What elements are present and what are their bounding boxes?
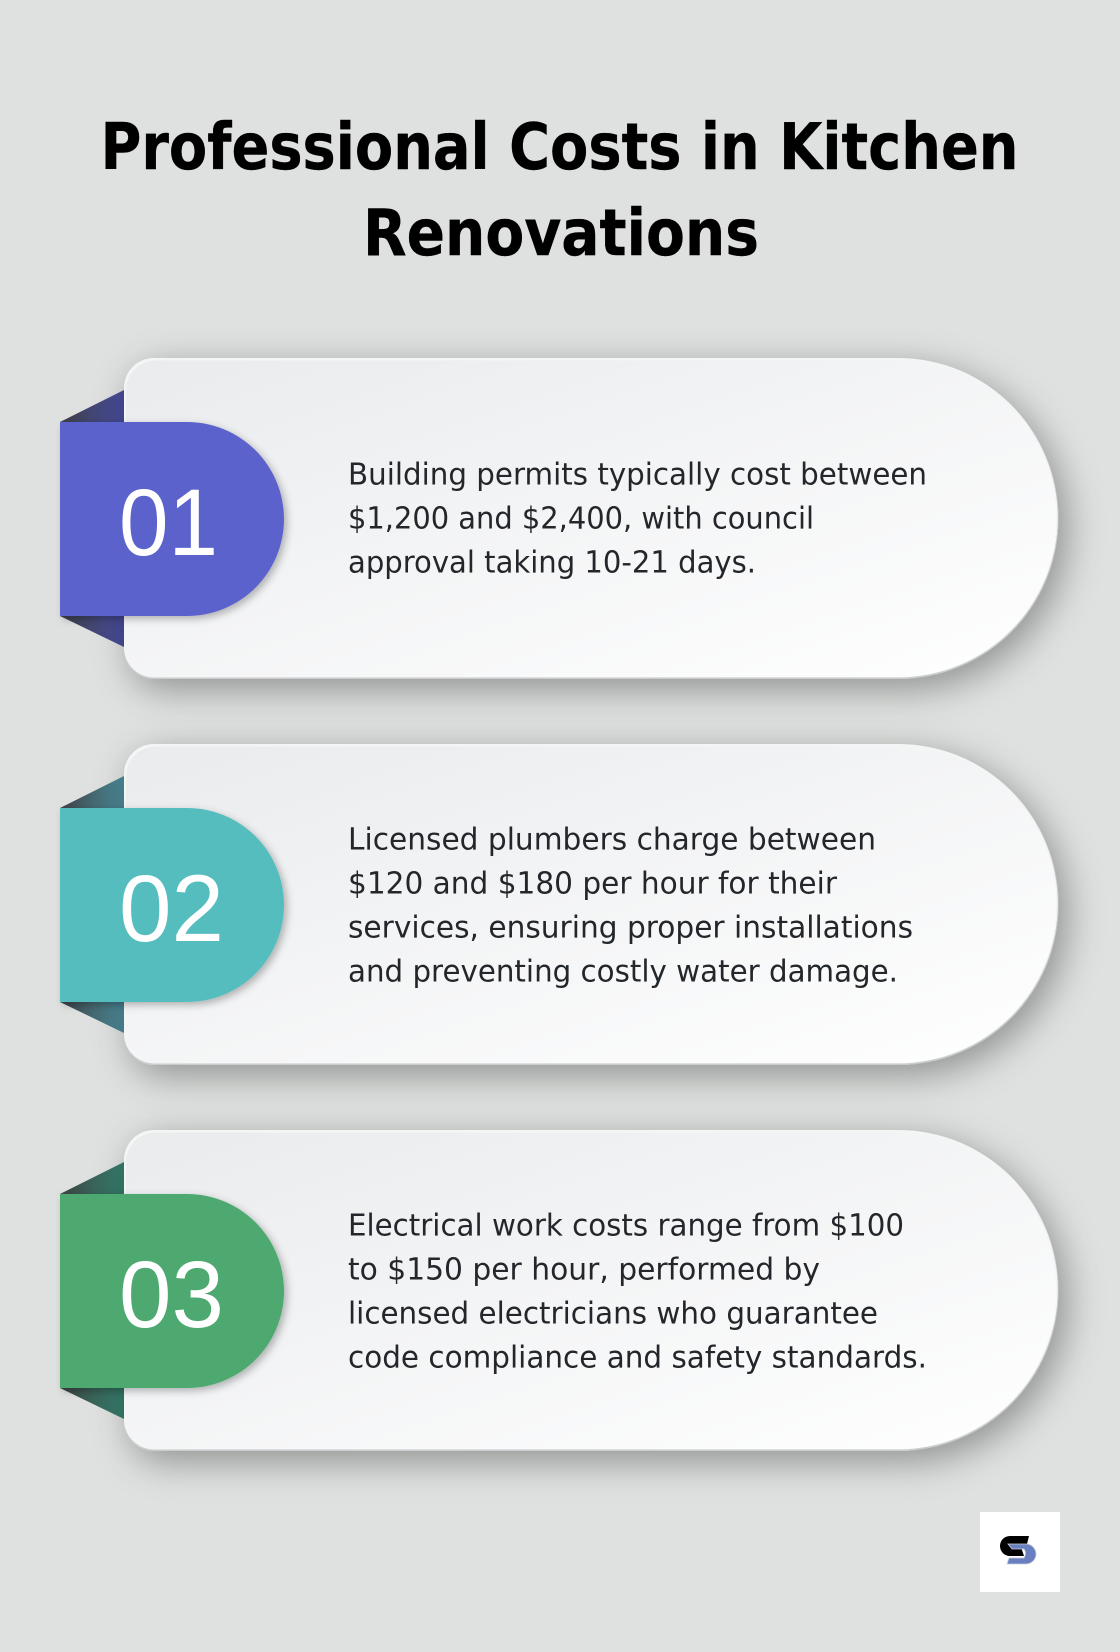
text: step 01: $1,200 and $2,400, with council bbox=[348, 502, 814, 536]
logo badge bbox=[980, 1512, 1060, 1592]
number tab 03: 03 bbox=[119, 1242, 224, 1348]
number tab 01: 01 bbox=[119, 470, 218, 576]
text: step 01 bbox=[348, 458, 927, 580]
panel: step 03 electrical work bbox=[60, 1130, 1058, 1451]
text: step 01: Building permits typically cost between bbox=[348, 458, 927, 492]
title: Renovations bbox=[363, 197, 759, 271]
text: step 03: to $150 per hour, performed by bbox=[348, 1252, 820, 1288]
ribbon fold: bottom bbox=[60, 1388, 124, 1419]
text: step 02: services, ensuring proper installations bbox=[348, 910, 913, 946]
text: step 03: licensed electricians who guarantee bbox=[348, 1296, 878, 1332]
text: step 03 bbox=[348, 1208, 927, 1376]
icon: logo mark bbox=[1000, 1536, 1036, 1564]
text: step 02: Licensed plumbers charge between bbox=[348, 822, 876, 858]
card bbox=[124, 358, 1058, 679]
ribbon fold: bottom bbox=[60, 616, 124, 647]
number tab 01 bbox=[60, 422, 284, 616]
text: step 02: and preventing costly water damage. bbox=[348, 954, 898, 990]
number tab 03 bbox=[60, 1194, 284, 1388]
ribbon fold: top bbox=[60, 1162, 124, 1194]
ribbon fold: top bbox=[60, 390, 124, 422]
ribbon fold: bottom bbox=[60, 1002, 124, 1033]
text: step 02: $120 and $180 per hour for their bbox=[348, 866, 837, 902]
panel: step 01 building permits bbox=[60, 358, 1058, 679]
number tab 02: 02 bbox=[119, 856, 224, 962]
text: step 01: approval taking 10-21 days. bbox=[348, 546, 756, 580]
text: step 03: code compliance and safety standards. bbox=[348, 1340, 927, 1376]
card bbox=[124, 744, 1058, 1065]
panel: step 02 licensed plumbers bbox=[60, 744, 1058, 1065]
title bbox=[100, 111, 1018, 271]
number tab 02 bbox=[60, 808, 284, 1002]
card bbox=[124, 1130, 1058, 1451]
ribbon fold: top bbox=[60, 776, 124, 808]
text: step 03: Electrical work costs range from $100 bbox=[348, 1208, 904, 1244]
text: step 02 bbox=[348, 822, 913, 990]
